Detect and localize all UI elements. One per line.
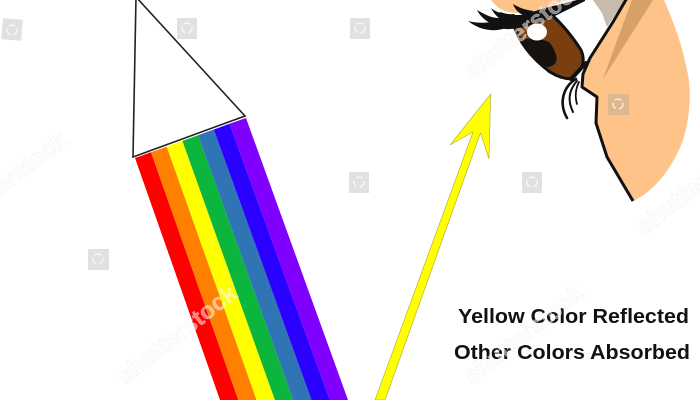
nose shadow <box>603 0 653 79</box>
reflected yellow arrow <box>375 94 491 400</box>
watermark: shutterstock <box>112 279 243 390</box>
prism <box>133 0 245 157</box>
upper eyelid and lash mass <box>468 0 585 30</box>
pupil <box>522 39 557 67</box>
caption: others absorbed: Other Colors Absorbed <box>454 342 690 364</box>
eye highlight <box>527 24 547 40</box>
eye <box>468 0 586 118</box>
rainbow light beam <box>135 118 348 400</box>
grey eye socket shadow <box>593 0 625 27</box>
face outline <box>582 0 633 201</box>
iris <box>513 16 583 79</box>
face <box>582 0 690 201</box>
skin <box>582 0 690 201</box>
eyelid <box>490 0 572 13</box>
watermark: shutterstock <box>459 279 590 390</box>
caption: yellow reflected: Yellow Color Reflected <box>458 306 689 328</box>
lower lashes <box>563 63 586 118</box>
